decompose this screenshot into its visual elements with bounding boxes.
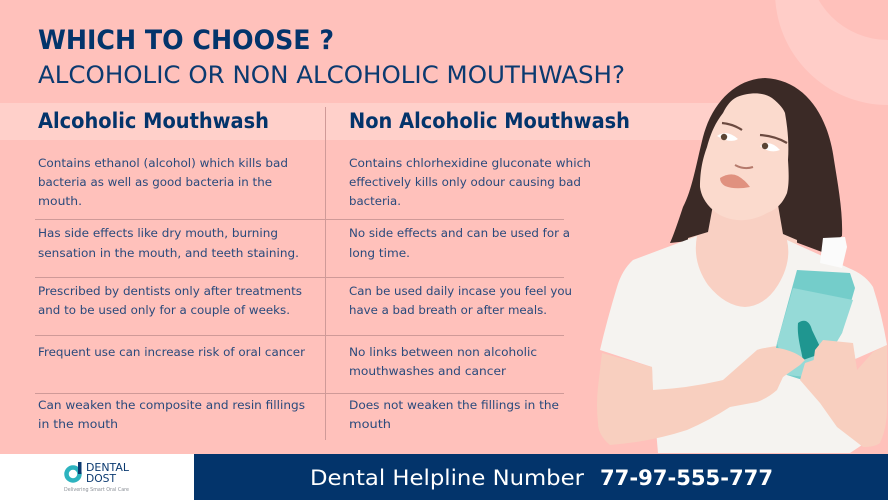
footer: helpline bar: Dental Helpline Number [310,466,584,490]
column: non alcoholic mouthwash: Non Alcoholic Mouthwash [349,109,630,133]
t-shirt [600,236,887,453]
left arm [597,346,803,445]
column: alcoholic mouthwash: Frequent use can increase risk of oral cancer [38,345,305,359]
column: alcoholic mouthwash: Prescribed by dentists only after treatments [38,284,302,298]
column: alcoholic mouthwash: Contains ethanol (alcohol) which kills bad [38,156,288,170]
footer: helpline bar: 77-97-555-777 [600,466,773,490]
woman holding mouthwash bottle [597,78,887,453]
face [700,93,789,220]
footer: helpline bar [194,454,888,500]
facial features [717,123,787,188]
header band [0,103,720,140]
column: non alcoholic mouthwash: No links between non alcoholic [349,345,537,359]
column: alcoholic mouthwash: Can weaken the composite and resin fillings [38,398,305,412]
fingers [752,345,857,388]
bottle [773,270,855,383]
column: alcoholic mouthwash: Alcoholic Mouthwash [38,109,269,133]
title: WHICH TO CHOOSE ? [38,25,334,56]
logo mark [66,462,82,480]
column: non alcoholic mouthwash: Does not weaken the fillings in the [349,398,559,412]
column: non alcoholic mouthwash [349,109,630,431]
column: alcoholic mouthwash: sensation in the mouth, and teeth staining. [38,246,299,260]
column: alcoholic mouthwash: in the mouth [38,417,118,431]
decorative corner circles [775,0,888,105]
title [38,25,625,89]
bottle cap [820,237,847,268]
column: alcoholic mouthwash: bacteria as well as good bacteria in the [38,175,272,189]
neck and chest [688,205,797,312]
right arm [800,340,887,447]
column: non alcoholic mouthwash: Contains chlorhexidine gluconate which [349,156,591,170]
column: non alcoholic mouthwash: long time. [349,246,410,260]
table dividers [35,107,564,440]
column: non alcoholic mouthwash: bacteria. [349,194,401,208]
column: alcoholic mouthwash [38,109,305,431]
column: non alcoholic mouthwash: Can be used daily incase you feel you [349,284,572,298]
column: alcoholic mouthwash: and to be used only for a couple of weeks. [38,303,290,317]
column: non alcoholic mouthwash: No side effects and can be used for a [349,226,570,240]
column: non alcoholic mouthwash: have a bad breath or after meals. [349,303,547,317]
column: non alcoholic mouthwash: mouth [349,417,391,431]
column: non alcoholic mouthwash: mouthwashes and cancer [349,364,506,378]
footer: logo area [0,454,194,500]
title: ALCOHOLIC OR NON ALCOHOLIC MOUTHWASH? [38,61,625,89]
footer: logo area: DOST [86,473,117,485]
footer: logo area: Delivering Smart Oral Care [64,487,130,493]
hair [670,78,842,252]
footer: logo area: DENTAL [86,462,129,474]
column: non alcoholic mouthwash: effectively kills only odour causing bad [349,175,581,189]
column: alcoholic mouthwash: mouth. [38,194,82,208]
column: alcoholic mouthwash: Has side effects like dry mouth, burning [38,226,278,240]
